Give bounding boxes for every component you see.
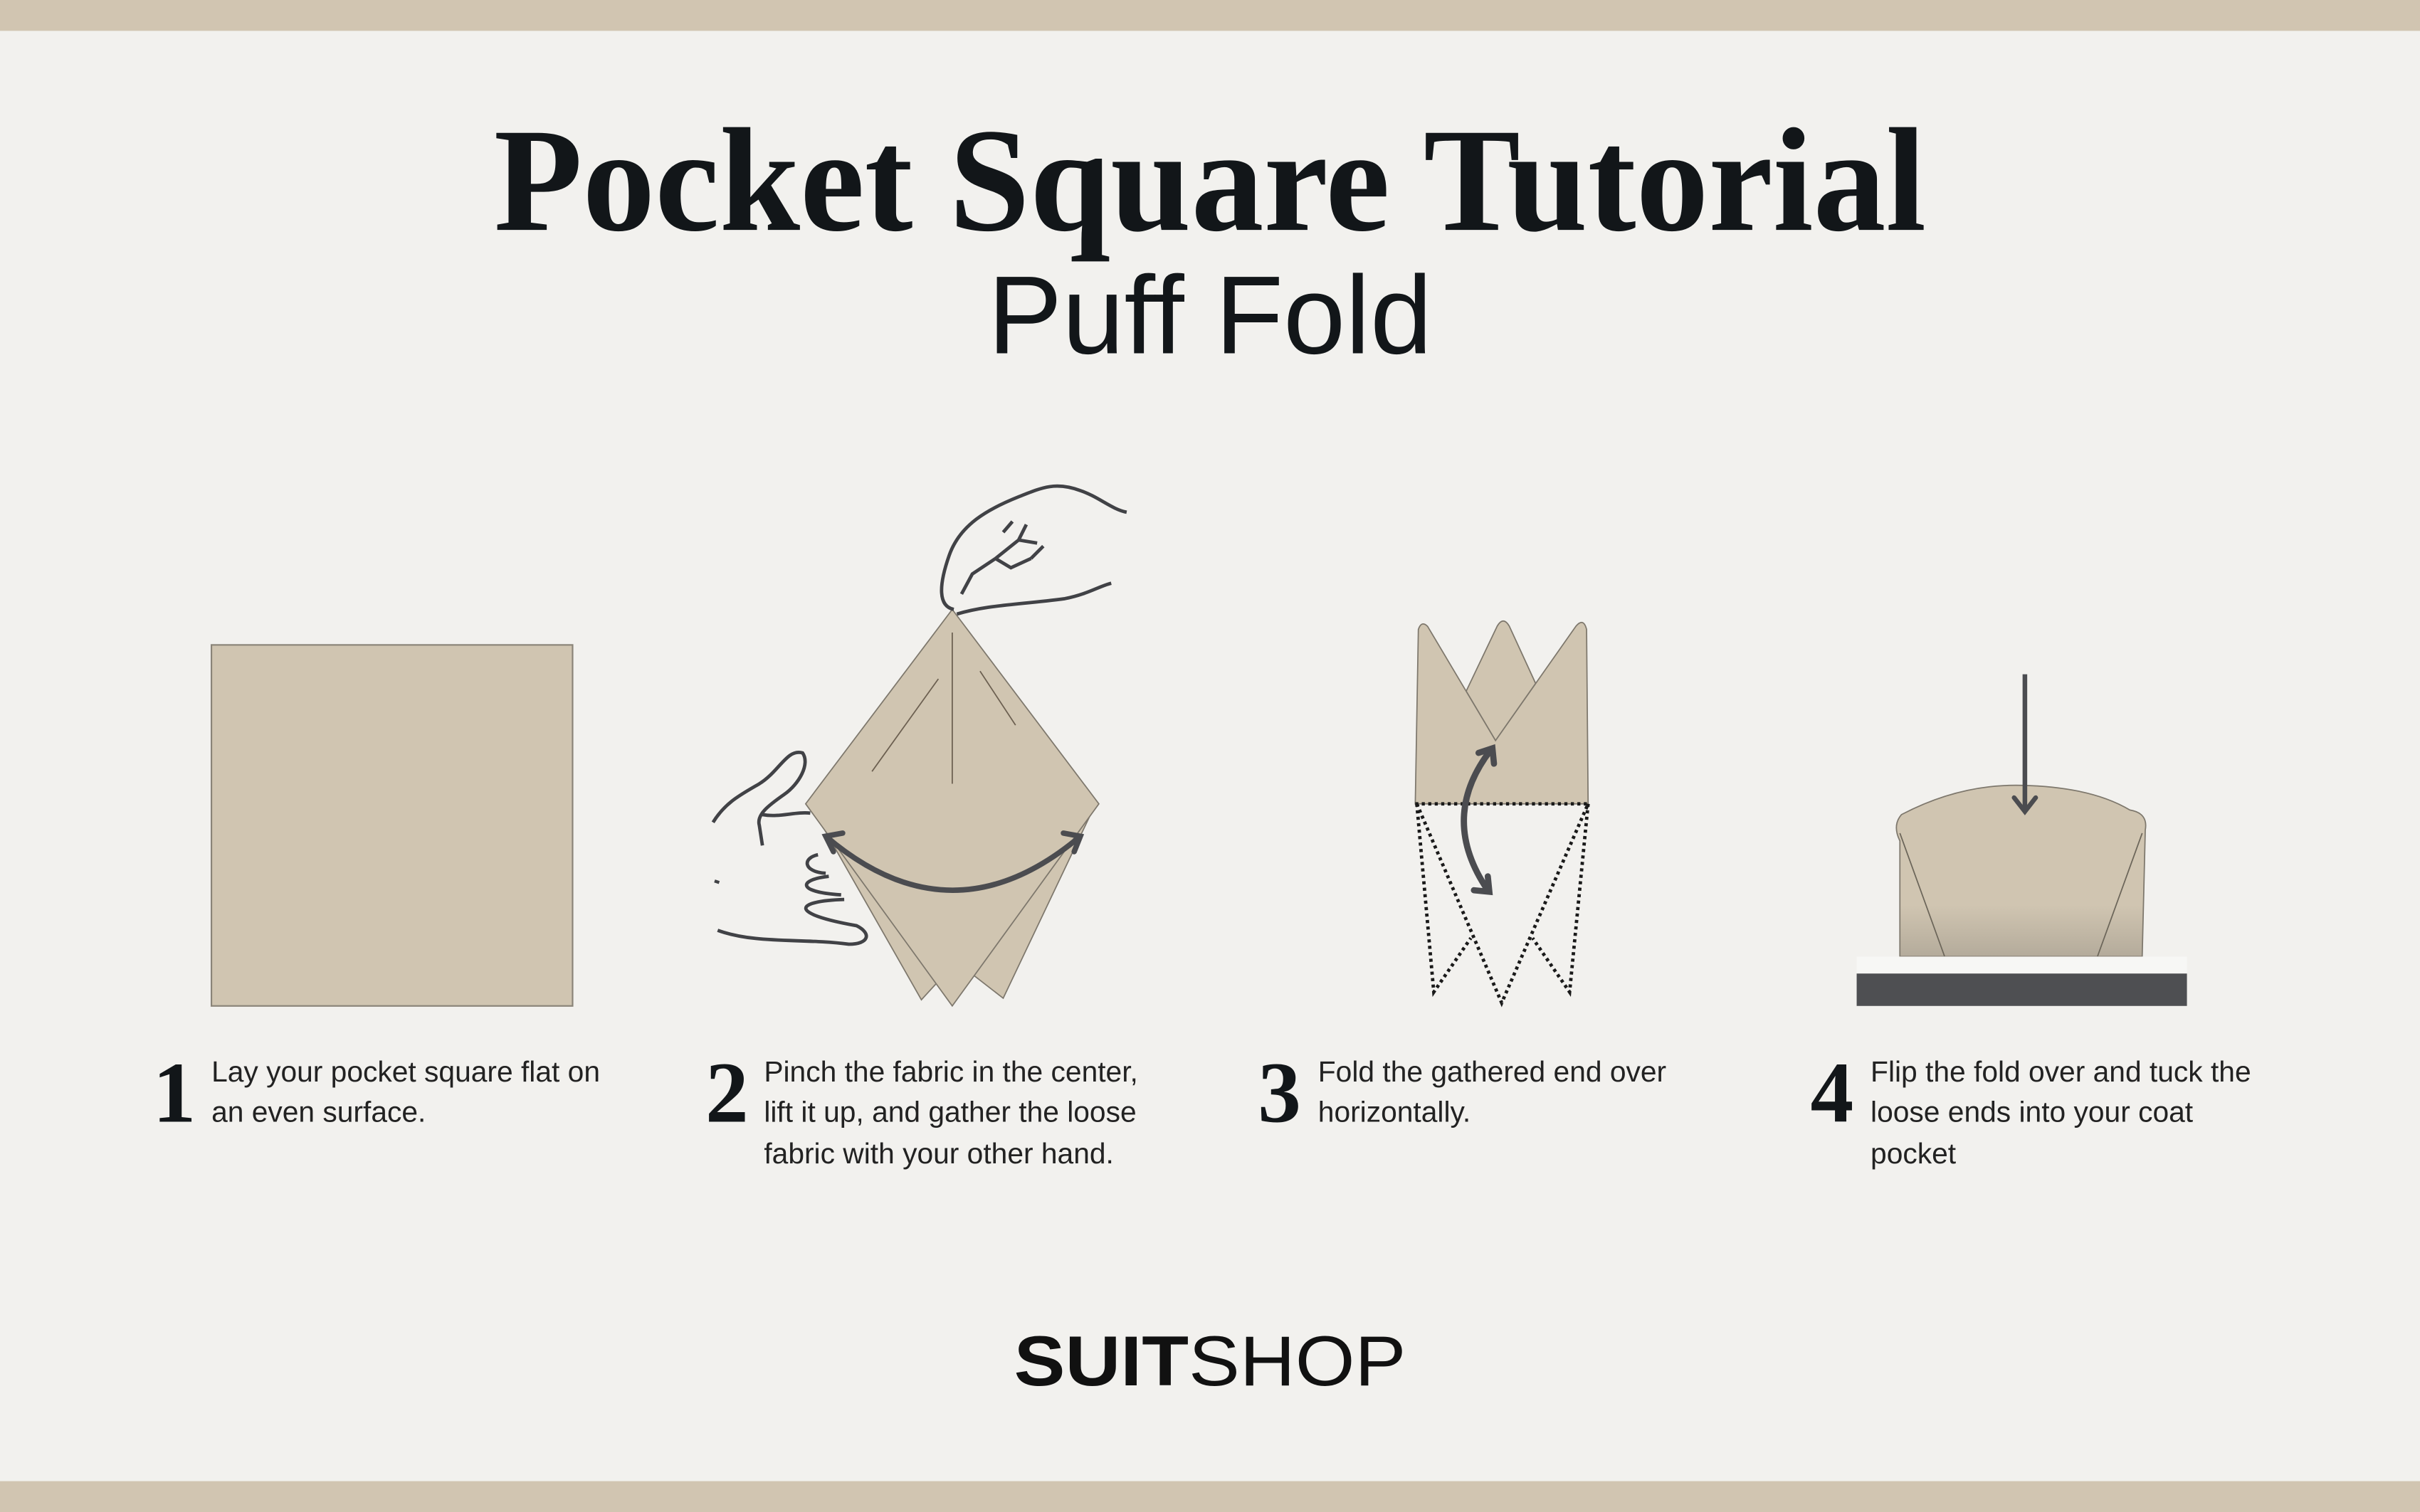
step 4 text: loose ends into your coat [1871,1095,2194,1128]
step 4 text: pocket [1871,1137,1957,1170]
step 3 text: 3 [1258,1045,1301,1141]
step 1 text: 1 [153,1045,196,1141]
step 4 text: 4 [1810,1045,1853,1141]
icon: step 4 tuck into pocket [1857,675,2187,1006]
icon: step 2 pinched fabric with hands [713,486,1127,1006]
step 2 text: Pinch the fabric in the center, [764,1055,1138,1088]
step 1 text [153,1045,600,1141]
step 3 text [1258,1045,1666,1141]
step 2 text: fabric with your other hand. [764,1137,1114,1170]
step 2 text: lift it up, and gather the loose [764,1095,1137,1128]
step 2 text [705,1045,1138,1170]
step 2 text: 2 [705,1045,749,1141]
icon: step 3 folded crown with arrow [1415,621,1588,1003]
step 1 text: Lay your pocket square flat on [211,1055,600,1088]
step 4 text [1810,1045,2251,1170]
icon: step 1 flat square [211,645,572,1006]
step 3 text: horizontally. [1318,1095,1471,1128]
subtitle: Puff Fold [988,254,1432,378]
step 3 text: Fold the gathered end over [1318,1055,1666,1088]
step 1 text: an even surface. [211,1095,426,1128]
title: Pocket Square Tutorial [494,99,1926,263]
logo: SUIT SHOP [1014,1322,1406,1401]
step 4 text: Flip the fold over and tuck the [1871,1055,2251,1088]
